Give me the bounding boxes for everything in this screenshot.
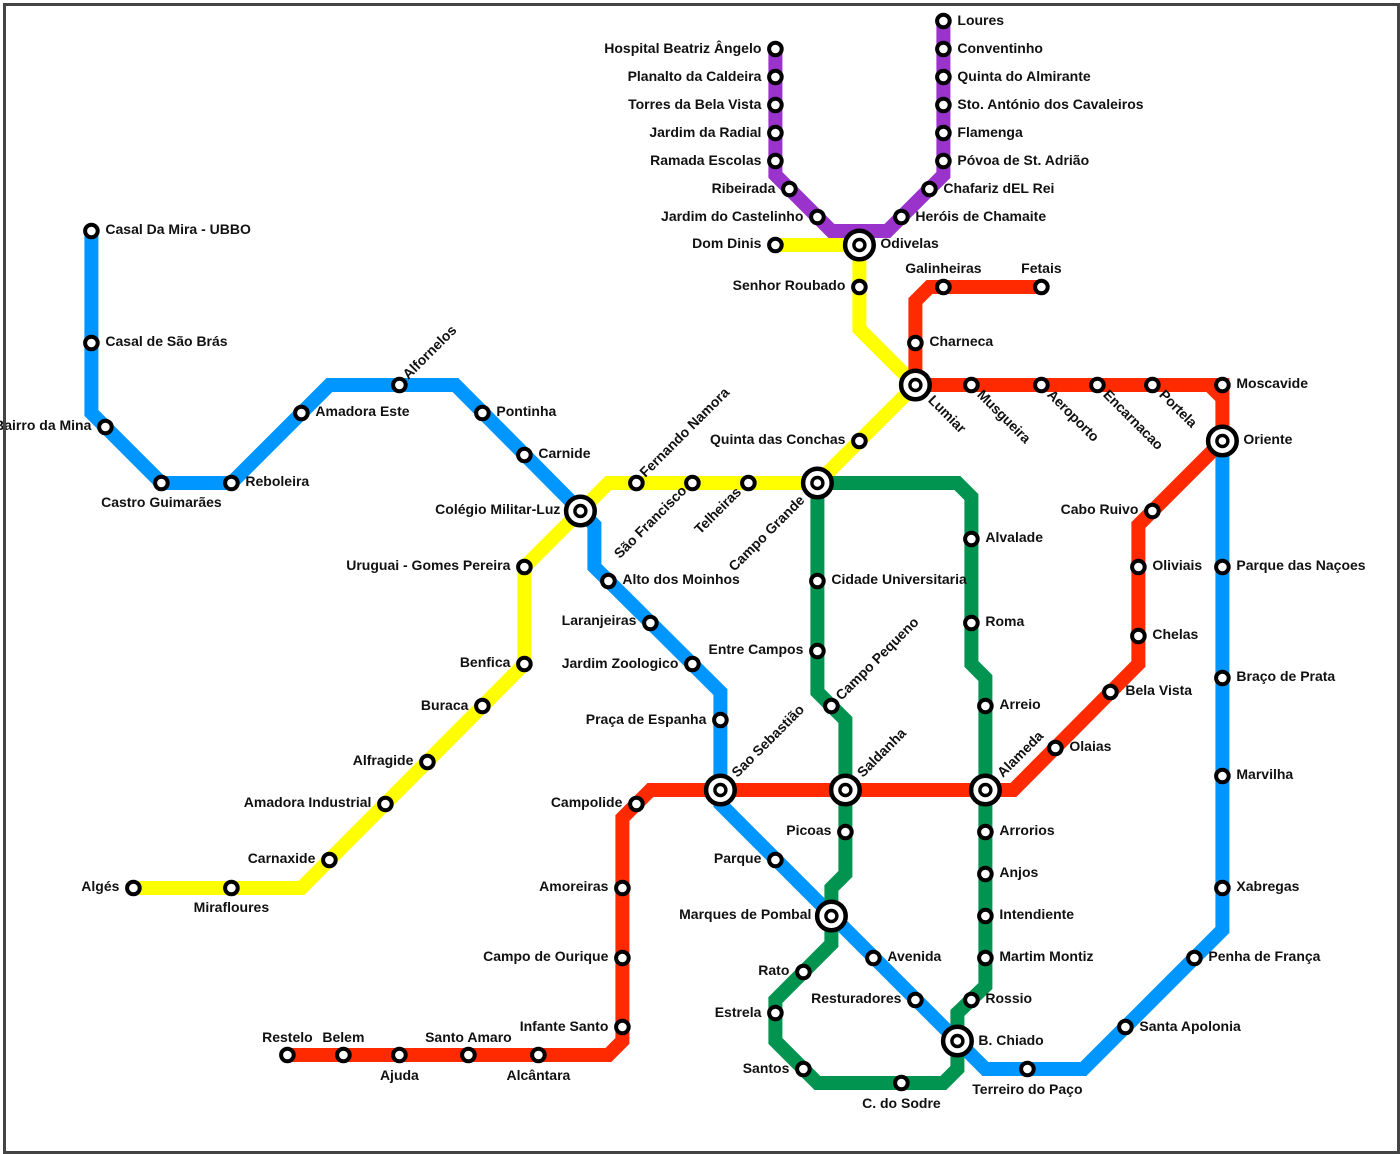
station: Castro Guimarães (101, 477, 222, 510)
station: Parque (714, 850, 782, 866)
interchange: Lumiar (901, 371, 970, 437)
station: Anjos (979, 864, 1039, 880)
station: Resturadores: Resturadores (811, 990, 902, 1006)
blue line (91, 231, 1222, 1069)
interchange: Campo Grande (725, 469, 832, 574)
station: Fetais: Fetais (1021, 260, 1062, 276)
station: Hospital Beatriz Ângelo: Hospital Beatriz Ângelo (604, 39, 761, 56)
station: Flamenga: Flamenga (957, 124, 1023, 140)
station: Olaias (1049, 738, 1112, 754)
station: Cidade Universitaria: Cidade Universitaria (831, 571, 967, 587)
station: Belem: Belem (322, 1029, 364, 1045)
station: Carnaxide: Carnaxide (248, 850, 316, 866)
station: Portela: Portela (1156, 386, 1201, 431)
station: Infante Santo: Infante Santo (520, 1018, 608, 1034)
station: Arreio: Arreio (999, 696, 1041, 712)
station: Picoas: Picoas (786, 822, 832, 838)
station: Conventinho: Conventinho (957, 40, 1043, 56)
interchange: Oriente: Oriente (1243, 431, 1293, 447)
station: Rossio (965, 990, 1032, 1006)
station: Mirafloures: Mirafloures (194, 899, 269, 915)
station: Charneca: Charneca (929, 333, 993, 349)
station: Jardim do Castelinho: Jardim do Castelinho (661, 208, 803, 224)
interchange: Marques de Pombal (679, 902, 846, 930)
station: Arreio (979, 696, 1041, 712)
station: Ribeirada: Ribeirada (712, 180, 776, 196)
station: Estrela (715, 1004, 782, 1020)
station: Heróis de Chamaite: Heróis de Chamaite (915, 208, 1046, 224)
station: Encarnacao: Encarnacao (1100, 386, 1167, 453)
station: Terreiro do Paço (972, 1063, 1083, 1097)
interchange: Marques de Pombal: Marques de Pombal (679, 906, 811, 922)
station: Arrorios: Arrorios (999, 822, 1055, 838)
station: Ajuda: Ajuda (380, 1067, 419, 1083)
interchange: Sao Sebastião: Sao Sebastião (728, 701, 807, 780)
interchange: Alameda: Alameda (994, 727, 1046, 780)
station: Alcântara (506, 1049, 571, 1083)
station: Amoreiras: Amoreiras (539, 878, 609, 894)
station: Santos (743, 1060, 810, 1076)
interchange: B. Chiado: B. Chiado (978, 1032, 1044, 1048)
station: Senhor Roubado: Senhor Roubado (733, 277, 845, 293)
station: Jardim Zoologico: Jardim Zoologico (562, 655, 678, 671)
station: Santo Amaro: Santo Amaro (425, 1029, 512, 1045)
station: Fernando Namora: Fernando Namora (636, 384, 732, 480)
station: Alvalade: Alvalade (985, 529, 1043, 545)
interchange: Colégio Militar-Luz: Colégio Militar-Luz (435, 501, 560, 517)
station: Sto. António dos Cavaleiros: Sto. António dos Cavaleiros (957, 96, 1144, 112)
station: Praça de Espanha: Praça de Espanha (586, 711, 707, 727)
station: Ramada Escolas: Ramada Escolas (650, 152, 762, 168)
station: Moscavide: Moscavide (1236, 375, 1308, 391)
station: Santa Apolonia: Santa Apolonia (1139, 1018, 1241, 1034)
station: Rossio: Rossio (985, 990, 1032, 1006)
station: Chelas (1132, 626, 1199, 642)
interchange: Saldanha: Saldanha (854, 725, 909, 780)
station: C. do Sodre (862, 1077, 941, 1111)
red line (287, 287, 1222, 1055)
station: Restelo: Restelo (262, 1029, 313, 1045)
station: Algés: Algés (81, 878, 120, 894)
station: Parque das Naçoes: Parque das Naçoes (1236, 557, 1366, 573)
station: Restelo (262, 1029, 313, 1061)
station: Musgueira: Musgueira (974, 386, 1034, 446)
station: Estrela: Estrela (715, 1004, 762, 1020)
station: Marvilha: Marvilha (1236, 766, 1293, 782)
station: Galinheiras (905, 260, 982, 293)
station: Avenida: Avenida (887, 948, 942, 964)
station: Jardim da Radial: Jardim da Radial (649, 124, 761, 140)
interchange: Colégio Militar-Luz (435, 497, 595, 525)
station: Santo Amaro (425, 1029, 512, 1061)
station: Roma (965, 613, 1025, 629)
interchange: Lumiar: Lumiar (925, 392, 970, 437)
station: Intendiente: Intendiente (999, 906, 1074, 922)
station: Entre Campos: Entre Campos (708, 641, 804, 657)
station: Telheiras: Telheiras (691, 484, 744, 537)
yellow line (133, 245, 915, 888)
station: Laranjeiras: Laranjeiras (562, 612, 637, 628)
station: Uruguai - Gomes Pereira: Uruguai - Gomes Pereira (346, 557, 511, 573)
station: Xabregas: Xabregas (1236, 878, 1300, 894)
station: Ajuda (380, 1049, 419, 1083)
station: Galinheiras: Galinheiras (905, 260, 982, 276)
station: Alto dos Moinhos: Alto dos Moinhos (622, 571, 740, 587)
station: Loures (937, 12, 1004, 28)
station: Amadora Este: Amadora Este (315, 403, 410, 419)
station: Chafariz dEL Rei: Chafariz dEL Rei (943, 180, 1054, 196)
station: Oliviais: Oliviais (1152, 557, 1202, 573)
interchange: B. Chiado (943, 1027, 1044, 1055)
station: Campolide: Campolide (551, 794, 623, 810)
interchange: Sao Sebastião (706, 701, 807, 804)
green line (775, 483, 985, 1083)
station: Torres da Bela Vista: Torres da Bela Vista (628, 96, 762, 112)
station: Terreiro do Paço: Terreiro do Paço (972, 1081, 1083, 1097)
station: Carnide: Carnide (538, 445, 591, 461)
station: Parque: Parque (714, 850, 762, 866)
interchange: Campo Grande: Campo Grande (725, 492, 808, 574)
station: Benfica: Benfica (460, 654, 511, 670)
station: Campo de Ourique: Campo de Ourique (483, 948, 609, 964)
station: Planalto da Caldeira: Planalto da Caldeira (628, 68, 762, 84)
interchange: Odivelas: Odivelas (880, 235, 939, 251)
station: Portela (1146, 379, 1201, 431)
station: Picoas (786, 822, 852, 838)
station: Belem (322, 1029, 364, 1061)
station: Santos: Santos (743, 1060, 790, 1076)
station: Cabo Ruivo: Cabo Ruivo (1061, 501, 1138, 517)
station: Quinta do Almirante: Quinta do Almirante (957, 68, 1091, 84)
station: Algés (81, 878, 140, 894)
station: Quinta das Conchas: Quinta das Conchas (710, 431, 846, 447)
station: C. do Sodre: C. do Sodre (862, 1095, 941, 1111)
station: Oliviais (1132, 557, 1202, 573)
station: Dom Dinis: Dom Dinis (692, 235, 762, 251)
station: Castro Guimarães: Castro Guimarães (101, 494, 222, 510)
interchange: Oriente (1208, 427, 1293, 455)
station: Alfragide: Alfragide (353, 752, 414, 768)
station: Loures: Loures (957, 12, 1004, 28)
station: Braço de Prata: Braço de Prata (1236, 668, 1335, 684)
station: Buraca: Buraca (421, 697, 469, 713)
station: Rato: Rato (758, 962, 789, 978)
station: Amadora Industrial: Amadora Industrial (244, 794, 371, 810)
station: Campo Pequeno: Campo Pequeno (832, 614, 922, 703)
station: Aeroporto: Aeroporto (1044, 386, 1102, 445)
station: Chelas: Chelas (1152, 626, 1199, 642)
station: Olaias: Olaias (1069, 738, 1112, 754)
station: Roma: Roma (985, 613, 1025, 629)
station: Martim Montiz: Martim Montiz (999, 948, 1094, 964)
purple line (775, 21, 943, 231)
station: Póvoa de St. Adrião: Póvoa de St. Adrião (957, 152, 1089, 168)
interchange: Alameda (971, 727, 1046, 804)
station: Casal Da Mira - UBBO: Casal Da Mira - UBBO (105, 221, 251, 237)
station: Casal de São Brás: Casal de São Brás (105, 333, 228, 349)
station: Anjos: Anjos (999, 864, 1039, 880)
station: Reboleira: Reboleira (245, 473, 309, 489)
station: Bela Vista: Bela Vista (1125, 682, 1192, 698)
station: Penha de França: Penha de França (1208, 948, 1321, 964)
station: São Francisco: São Francisco (611, 482, 690, 561)
interchange: Odivelas (845, 231, 939, 259)
station: Alcântara: Alcântara (506, 1067, 571, 1083)
station: Fetais (1021, 260, 1062, 293)
station: Alfornelos: Alfornelos (399, 322, 460, 382)
station: Rato (758, 962, 810, 978)
station: Mirafloures (194, 882, 269, 915)
interchange: Saldanha (831, 725, 909, 804)
station: Pontinha: Pontinha (496, 403, 556, 419)
